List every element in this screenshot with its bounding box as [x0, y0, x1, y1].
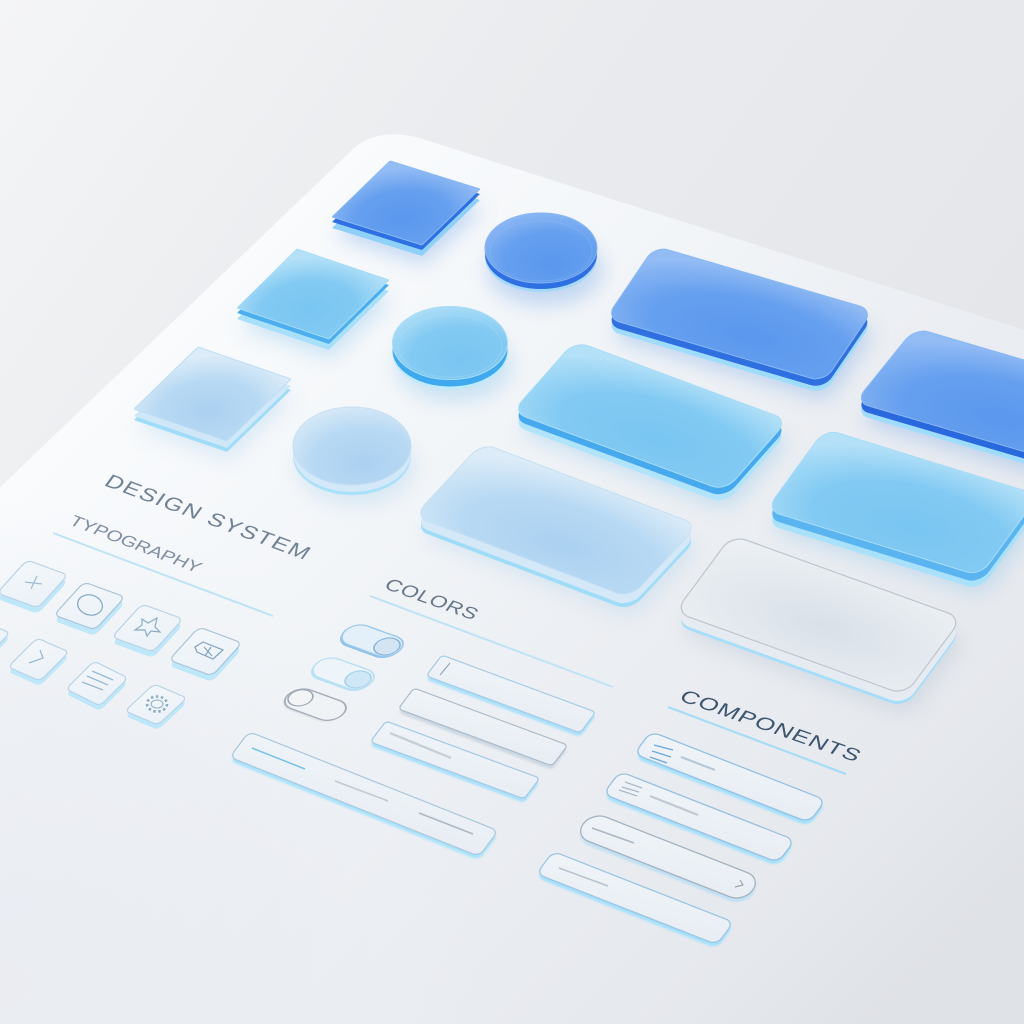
swatch: mid blue circle [392, 306, 512, 402]
input field: filled [370, 721, 540, 803]
swatch: pale blue square [134, 347, 294, 461]
card: pale blue large [414, 443, 702, 618]
card: mid blue large [512, 341, 792, 511]
icon tile: gear [125, 684, 187, 730]
card: deep blue large, cropped at right [855, 328, 1024, 485]
swatch: mid blue square [237, 249, 392, 359]
list row: blue menu [634, 731, 826, 827]
icon tile: circle [54, 582, 125, 636]
heading: typography: TYPOGRAPHY [66, 512, 206, 576]
swatch: deep blue square [332, 161, 483, 265]
input field: cursor [426, 655, 596, 737]
heading: colors: COLORS [380, 576, 482, 624]
swatch: pale blue circle [293, 407, 416, 506]
card: mid blue large, cropped at right [766, 429, 1024, 596]
list row: plain field [536, 851, 734, 949]
icon tile: partially cropped [0, 620, 10, 666]
icon tile: chevron [8, 638, 69, 686]
underline: components [668, 707, 846, 774]
heading: design system: DESIGN SYSTEM [100, 470, 315, 564]
card: clear glass large [675, 535, 966, 715]
underline: typography [53, 533, 273, 616]
icon tile: menu [66, 661, 128, 711]
swatch: deep blue circle [485, 213, 603, 306]
underline: colors [370, 596, 613, 687]
heading: components: COMPONENTS [676, 686, 865, 766]
toggle: clear [277, 685, 352, 726]
icon tile: star [112, 604, 183, 658]
tab bar: long segmented field [230, 732, 498, 860]
card: deep blue large [606, 246, 877, 402]
list row: gray menu [603, 771, 795, 867]
list row: dropdown pill [574, 812, 762, 906]
toggle: light blue [305, 654, 380, 695]
toggle: blue [334, 621, 409, 662]
icon tile: shield [169, 627, 242, 682]
icon tile: plus [0, 560, 68, 614]
input field: empty [398, 688, 568, 770]
